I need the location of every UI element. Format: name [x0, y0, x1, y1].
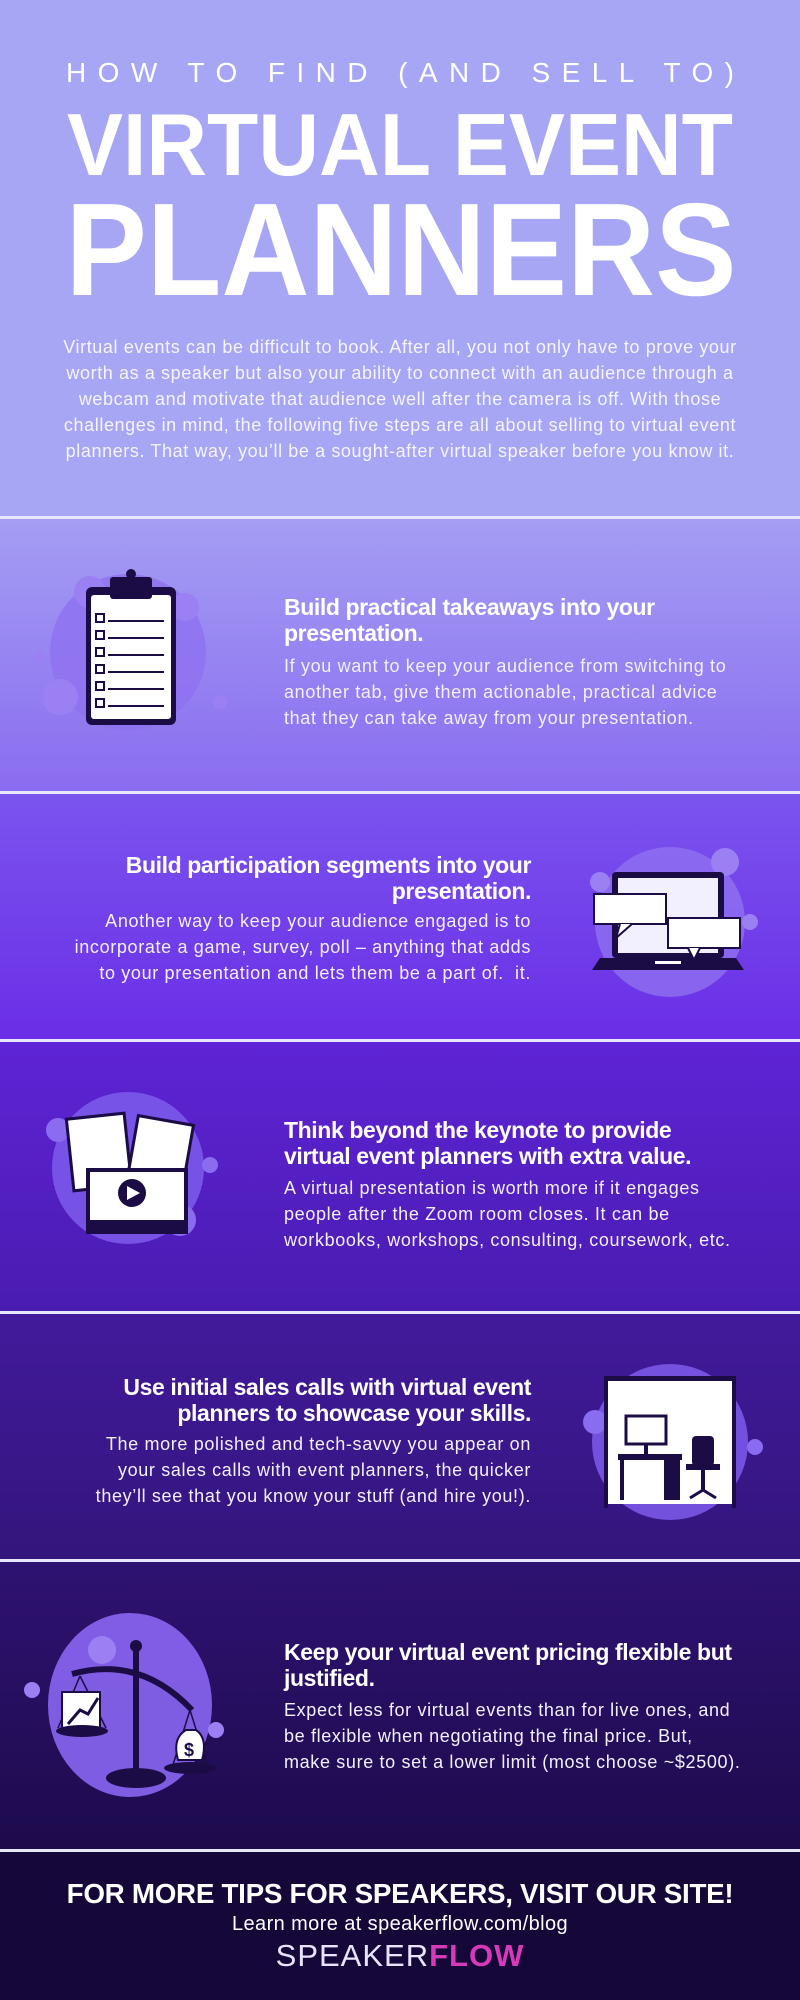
heading: step 4	[123, 1374, 532, 1426]
logo: speakerflow: SPEAKERFLOW	[276, 1938, 524, 1973]
text: step 5: make sure to set a lower limit (most choose ~$2500).	[284, 1752, 740, 1772]
intro paragraph	[63, 337, 737, 461]
icon: laptop with chat bubbles	[590, 847, 758, 997]
footer	[0, 1850, 800, 2000]
heading: step 2	[126, 852, 532, 904]
heading: step 3: Think beyond the keynote to provide	[284, 1117, 671, 1143]
text: step 4	[96, 1434, 531, 1506]
text: step 5: Expect less for virtual events than for live ones, and	[284, 1700, 730, 1720]
text: step 2: incorporate a game, survey, poll – anything that adds	[75, 937, 531, 957]
text: step 4: your sales calls with event planners, the quicker	[118, 1460, 531, 1480]
header panel	[0, 0, 800, 517]
intro paragraph: planners. That way, you’ll be a sought-after virtual speaker before you know it.	[66, 441, 734, 461]
text: step 2: to your presentation and lets them be a part of. it.	[99, 963, 531, 983]
text: step 1: If you want to keep your audience from switching to	[284, 656, 726, 676]
panel: step 4	[0, 1312, 800, 1560]
icon: scale	[24, 1613, 224, 1797]
text: step 1: that they can take away from your presentation.	[284, 708, 694, 728]
text: step 1: another tab, give them actionable, practical advice	[284, 682, 717, 702]
title: PLANNERS	[66, 176, 736, 320]
text: step 5	[284, 1700, 740, 1772]
title: VIRTUAL EVENT	[67, 95, 733, 194]
heading: step 5: justified.	[284, 1665, 375, 1691]
heading: step 3: virtual event planners with extra value.	[284, 1143, 691, 1169]
panel: step 3	[0, 1040, 800, 1312]
heading: step 2: presentation.	[392, 878, 531, 904]
panel: step 2	[0, 792, 800, 1040]
intro paragraph: worth as a speaker but also your ability to connect with an audience through a	[66, 363, 734, 383]
heading: step 4: Use initial sales calls with virtual event	[123, 1374, 531, 1400]
icon: workbooks and video	[46, 1092, 218, 1244]
text: step 3: workbooks, workshops, consulting, coursework, etc.	[284, 1230, 731, 1250]
text: step 2: Another way to keep your audience engaged is to	[105, 911, 531, 931]
heading: step 1	[284, 594, 655, 646]
text: step 2	[75, 911, 531, 983]
text: step 4: The more polished and tech-savvy you appear on	[106, 1434, 531, 1454]
heading: step 1: presentation.	[284, 620, 423, 646]
panel: step 5	[0, 1560, 800, 1850]
icon: desk setup	[583, 1364, 763, 1520]
heading: step 5: Keep your virtual event pricing flexible but	[284, 1639, 732, 1665]
heading: step 2: Build participation segments into your	[126, 852, 531, 878]
footer heading: FOR MORE TIPS FOR SPEAKERS, VISIT OUR SITE!	[67, 1878, 733, 1909]
heading: step 4: planners to showcase your skills.	[177, 1400, 531, 1426]
icon: scale: $	[184, 1740, 194, 1760]
icon: clipboard	[48, 569, 220, 725]
text: step 3: A virtual presentation is worth more if it engages	[284, 1178, 700, 1198]
intro paragraph: challenges in mind, the following five steps are all about selling to virtual event	[64, 415, 736, 435]
heading: step 3	[284, 1117, 691, 1169]
heading: step 1: Build practical takeaways into your	[284, 594, 655, 620]
heading: step 5	[284, 1639, 732, 1691]
title	[66, 57, 736, 320]
text: step 3: people after the Zoom room closes. It can be	[284, 1204, 670, 1224]
intro paragraph: Virtual events can be difficult to book. After all, you not only have to prove your	[63, 337, 737, 357]
text: step 4: they’ll see that you know your stuff (and hire you!).	[96, 1486, 531, 1506]
title: HOW TO FIND (AND SELL TO)	[66, 57, 734, 88]
panel: step 1	[0, 517, 800, 792]
footer link text: Learn more at speakerflow.com/blog	[232, 1913, 568, 1935]
text: step 5: be flexible when negotiating the final price. But,	[284, 1726, 693, 1746]
text: step 3	[284, 1178, 731, 1250]
intro paragraph: webcam and motivate that audience well after the camera is off. With those	[79, 389, 721, 409]
text: step 1	[284, 656, 726, 728]
